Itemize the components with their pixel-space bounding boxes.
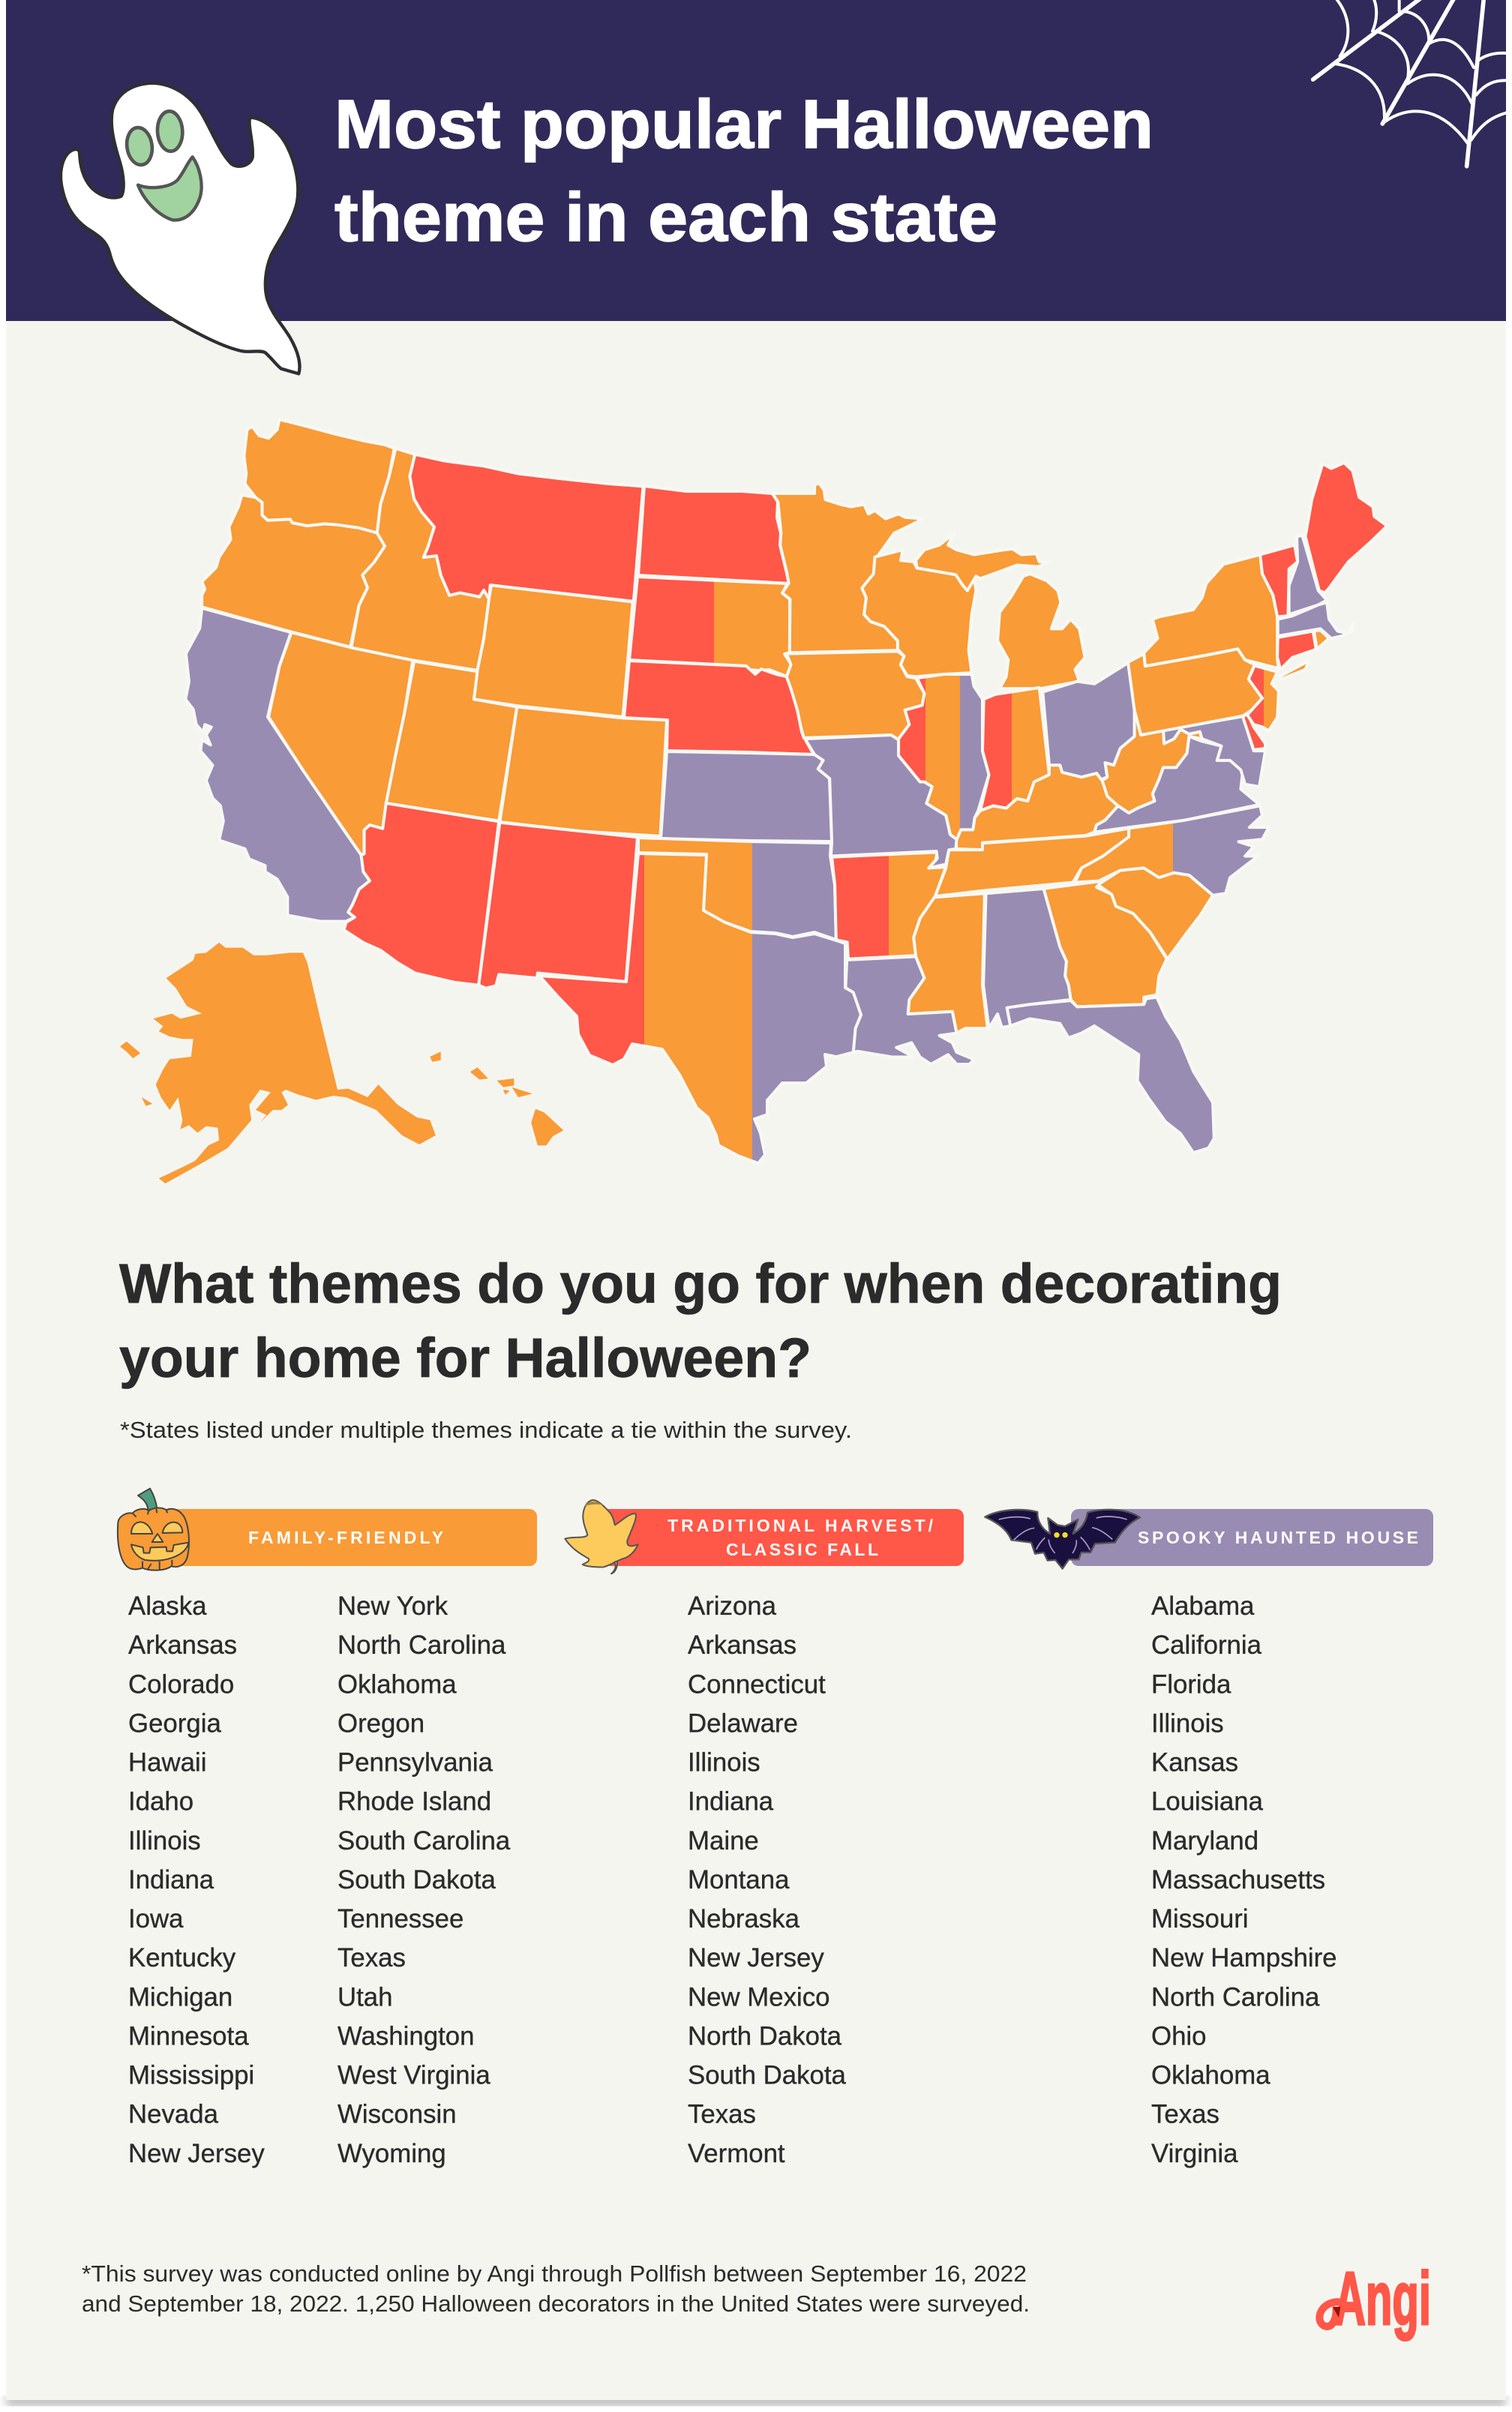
list: family-friendly states column 1: Colorado [128,1670,234,1699]
list: traditional harvest states: Vermont [688,2139,785,2168]
list: spooky haunted house states: Oklahoma [1151,2061,1270,2090]
list: spooky haunted house states: Massachusetts [1151,1865,1325,1894]
list: traditional harvest states: Arizona [688,1592,777,1621]
list: family-friendly states column 2: Oregon [338,1708,424,1738]
legend: traditional harvest: TRADITIONAL HARVEST/ [668,1516,934,1535]
list: family-friendly states column 2: Rhode Island [338,1787,491,1816]
list: traditional harvest states: Montana [688,1865,790,1894]
survey footnote: and September 18, 2022. 1,250 Halloween decorators in the United States were surveyed. [82,2290,1030,2317]
list: family-friendly states column 1: Indiana [128,1865,214,1894]
legend: family-friendly [118,1489,537,1570]
legend: traditional harvest: CLASSIC FALL [726,1540,878,1559]
list: spooky haunted house states: Louisiana [1151,1787,1264,1816]
list: family-friendly states column 2: Washington [338,2021,474,2050]
survey footnote [82,2260,1030,2317]
list: traditional harvest states: Illinois [688,1748,760,1778]
list: family-friendly states column 2: South Dakota [338,1865,496,1894]
list: family-friendly states column 1: Nevada [128,2100,219,2129]
section heading: your home for Halloween? [119,1327,812,1389]
list: family-friendly states column 2: Utah [338,1982,393,2012]
tie note: *States listed under multiple themes indicate a tie within the survey. [120,1417,852,1443]
list: spooky haunted house states: Florida [1151,1670,1232,1699]
map of United States [120,419,1388,1184]
list: family-friendly states column 1: Georgia [128,1708,221,1738]
logo: Angi [1319,2257,1431,2341]
logo: Angi: Angi [1334,2257,1431,2341]
list: traditional harvest states: Texas [688,2100,756,2129]
list: spooky haunted house states: Maryland [1151,1826,1258,1856]
western states [120,419,667,1184]
list: traditional harvest states: New Jersey [688,1943,824,1972]
list: family-friendly states column 1: Minnesota [128,2021,249,2050]
list: family-friendly states column 2: North Carolina [338,1630,506,1660]
central states [539,486,861,1163]
list: traditional harvest states: Arkansas [688,1630,796,1660]
Alaska [120,943,436,1184]
title: Most popular Halloween [334,86,1154,163]
list: spooky haunted house states: North Carolina [1151,1982,1320,2012]
list: family-friendly states column 1: Iowa [128,1904,184,1934]
list: traditional harvest states: Connecticut [688,1670,826,1699]
list: traditional harvest states: New Mexico [688,1982,830,2012]
icon: bat [985,1510,1140,1569]
list: family-friendly states column 1: Michigan [128,1982,232,2012]
list: family-friendly states column 1: Kentucky [128,1943,236,1972]
legend: spooky haunted house [985,1509,1433,1569]
header band [6,0,1506,321]
list: family-friendly states column 2: New York [338,1592,448,1621]
eastern states [772,463,1388,1153]
list: spooky haunted house states: Illinois [1151,1708,1224,1738]
list: traditional harvest states: North Dakota [688,2021,842,2050]
list: traditional harvest states: South Dakota [688,2061,847,2090]
list: spooky haunted house states: Texas [1151,2100,1220,2129]
list: family-friendly states column 1: Mississippi [128,2061,254,2090]
list: family-friendly states column 1: Idaho [128,1787,194,1816]
list: family-friendly states column 1: Illinois [128,1826,201,1856]
legend: spooky haunted house: SPOOKY HAUNTED HOUSE [1138,1528,1418,1547]
title: theme in each state [334,179,998,256]
list: family-friendly states column 2: South Carolina [338,1826,511,1856]
Hawaii [430,1052,563,1145]
list: family-friendly states column 1: Hawaii [128,1748,206,1778]
icon: autumn leaf [565,1500,638,1574]
list: family-friendly states column 1: New Jersey [128,2139,265,2168]
legend: traditional harvest [565,1500,964,1574]
list: family-friendly states column 1: Alaska [128,1592,207,1621]
icon: spider web [1313,0,1508,166]
section heading [119,1252,1282,1389]
list: traditional harvest states: Indiana [688,1787,774,1816]
list: spooky haunted house states: Kansas [1151,1748,1238,1778]
icon: pumpkin [118,1489,189,1570]
list: traditional harvest states: Maine [688,1826,759,1856]
list: family-friendly states column 1: Arkansas [128,1630,237,1660]
list: traditional harvest states: Nebraska [688,1904,800,1934]
list: spooky haunted house states: Virginia [1151,2139,1238,2168]
list: traditional harvest states: Delaware [688,1708,798,1738]
list: spooky haunted house states: California [1151,1630,1262,1660]
list: spooky haunted house states: Alabama [1151,1592,1255,1621]
list: spooky haunted house states: New Hampshire [1151,1943,1337,1972]
list: family-friendly states column 2: Wyoming [338,2139,446,2168]
title [334,86,1154,256]
list: spooky haunted house states: Ohio [1151,2021,1207,2050]
list: family-friendly states column 2: Tennessee [338,1904,464,1934]
icon: ghost [61,83,300,374]
survey footnote: *This survey was conducted online by Angi through Pollfish between September 16, 2022 [82,2260,1027,2287]
list: family-friendly states column 2: Oklahoma [338,1670,457,1699]
list: family-friendly states column 2: Texas [338,1943,406,1972]
list: spooky haunted house states: Missouri [1151,1904,1249,1934]
section heading: What themes do you go for when decorating [119,1252,1282,1315]
list: family-friendly states column 2: Pennsylvania [338,1748,494,1778]
legend: family-friendly: FAMILY-FRIENDLY [248,1528,443,1547]
list: family-friendly states column 2: Wisconsin [338,2100,457,2129]
list: family-friendly states column 2: West Virginia [338,2061,490,2090]
